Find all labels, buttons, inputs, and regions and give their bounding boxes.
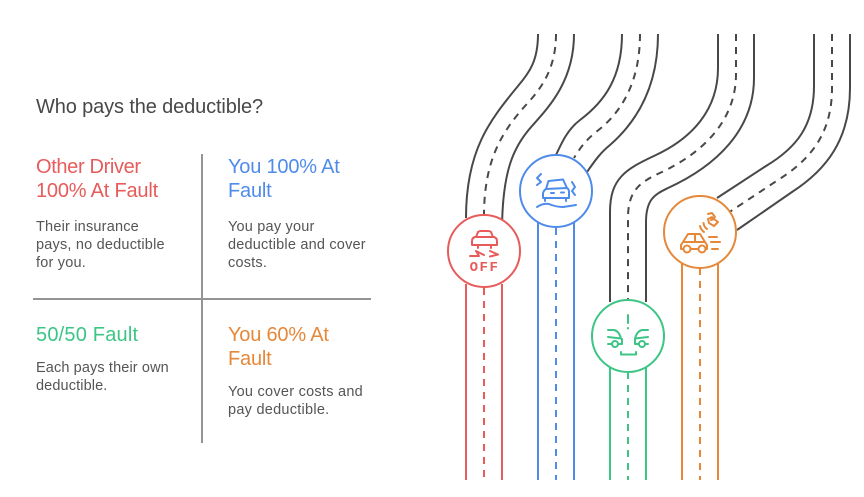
heading: you 60%: Fault	[228, 348, 271, 370]
title: Who pays the deductible?	[36, 96, 263, 118]
text: you 60%: pay deductible.	[228, 402, 329, 418]
road: red	[466, 34, 574, 480]
text: other driver: for you.	[36, 255, 86, 271]
text: other driver	[36, 219, 165, 271]
text: you 100%: You pay your	[228, 219, 315, 235]
heading: you 60%: You 60% At	[228, 324, 329, 346]
text: 50/50: Each pays their own	[36, 360, 169, 376]
icon: traction off (red circle)	[448, 215, 520, 287]
text: you 100%: deductible and cover	[228, 237, 366, 253]
heading: other driver: Other Driver	[36, 156, 141, 178]
text: other driver: pays, no deductible	[36, 237, 165, 253]
icon: car in fog (orange circle)	[664, 196, 736, 268]
heading: you 100%: You 100% At	[228, 156, 340, 178]
heading: other driver	[36, 156, 158, 202]
heading: 50/50: 50/50 Fault	[36, 324, 138, 346]
text: 50/50	[36, 360, 169, 394]
panel: you 60% at fault	[228, 324, 363, 418]
icon: car on slippery road (blue circle)	[520, 155, 592, 227]
text: 50/50: deductible.	[36, 378, 107, 394]
panel: you 100% at fault	[228, 156, 366, 271]
icon: two cars facing off (green circle)	[592, 300, 664, 372]
text: you 100%: costs.	[228, 255, 267, 271]
road: blue	[538, 34, 658, 480]
text: you 60%: You cover costs and	[228, 384, 363, 400]
heading: you 100%: Fault	[228, 180, 271, 202]
text: you 60%	[228, 384, 363, 418]
icon: traction off (red circle): OFF	[470, 260, 499, 276]
heading: you 100%	[228, 156, 340, 202]
heading: other driver: 100% At Fault	[36, 180, 158, 202]
road: green	[610, 34, 754, 480]
panel: other driver at fault	[36, 156, 165, 271]
road: orange	[682, 34, 850, 480]
text: you 100%	[228, 219, 366, 271]
panel: 50/50 fault	[36, 324, 169, 394]
heading: you 60%	[228, 324, 329, 370]
text: other driver: Their insurance	[36, 219, 139, 235]
